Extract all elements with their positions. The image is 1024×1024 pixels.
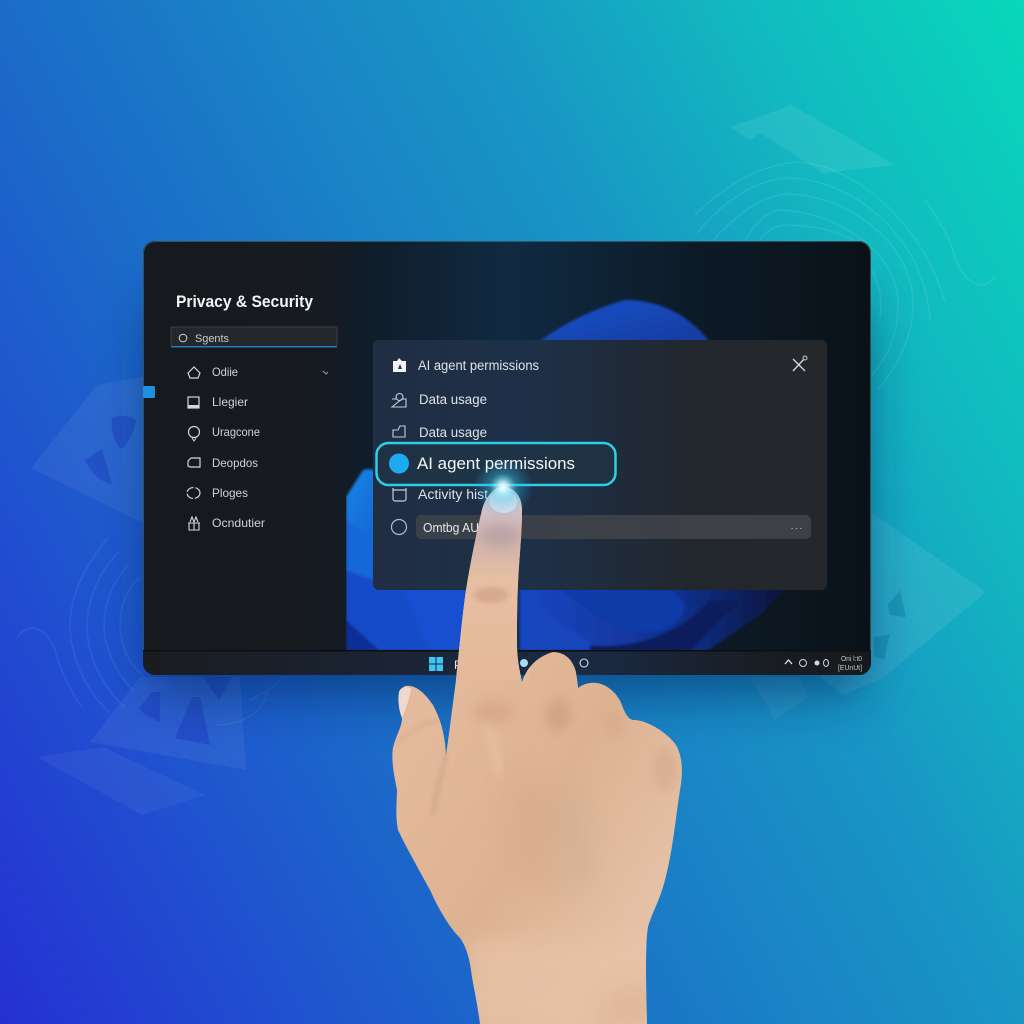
taskbar app icons: P	[454, 658, 462, 672]
wallpaper bloom	[346, 298, 786, 650]
taskbar app icons	[454, 658, 588, 672]
nav item: Deopdos	[188, 456, 258, 470]
decorative shapes: left	[31, 377, 143, 523]
thumb shading	[433, 755, 446, 815]
row: input pill: Omtbg AU	[423, 520, 479, 535]
nav item: Ploges	[187, 486, 248, 500]
nav item: Llegier: Llegier	[212, 395, 248, 409]
settings window	[143, 241, 871, 690]
search box: Sgents	[195, 333, 229, 345]
highlighted row box	[376, 443, 616, 485]
heading: Privacy & Security: Privacy & Security	[176, 292, 313, 311]
sidebar panel	[143, 241, 154, 252]
hand pointing	[392, 487, 682, 1024]
decorative shapes: lower left	[17, 538, 290, 815]
taskbar	[143, 650, 871, 675]
sidebar navigation	[187, 365, 328, 530]
row: Data usage (second): Data usage	[419, 425, 487, 440]
icon: start button	[429, 657, 443, 671]
highlighted row text: AI agent permissions	[417, 455, 575, 473]
nav item: Uragcone: Uragcone	[212, 425, 260, 439]
system tray: Oni l:t0	[841, 656, 862, 663]
wrist tone	[470, 940, 650, 1024]
nav item: Llegier	[188, 395, 248, 409]
nav item: Odiie	[188, 365, 328, 379]
back of hand shading	[509, 770, 560, 900]
row: AI agent permissions: AI agent permissions	[418, 358, 539, 373]
system tray	[785, 656, 862, 672]
nav item: Ploges: Ploges	[212, 486, 248, 500]
nav item: Deopdos: Deopdos	[212, 456, 258, 470]
nav item: Odiie: Odiie	[212, 365, 238, 379]
nav item: Ocndutier	[188, 516, 265, 530]
row: input pill	[392, 515, 811, 539]
decorative shapes: right	[750, 513, 986, 720]
nav item: Ocndutier: Ocndutier	[212, 516, 265, 530]
row: Activity history: Activity hist	[418, 487, 488, 502]
nav item: Uragcone	[188, 425, 260, 441]
knuckles	[476, 702, 510, 722]
window shadow	[150, 300, 865, 695]
system tray: [EUnUt]	[838, 665, 862, 672]
search box	[171, 327, 337, 348]
sidebar blue indicator	[143, 386, 155, 398]
close icon	[793, 356, 807, 371]
window edge	[144, 242, 870, 674]
decorative shapes: upper right	[695, 105, 995, 390]
thumbnail	[398, 687, 411, 718]
fingernail	[490, 492, 517, 513]
row: Data usage: Data usage	[419, 392, 487, 407]
dialog panel	[373, 340, 827, 590]
touch glow	[473, 457, 533, 517]
row: input pill: ...	[790, 525, 804, 531]
finger crease	[474, 587, 508, 603]
